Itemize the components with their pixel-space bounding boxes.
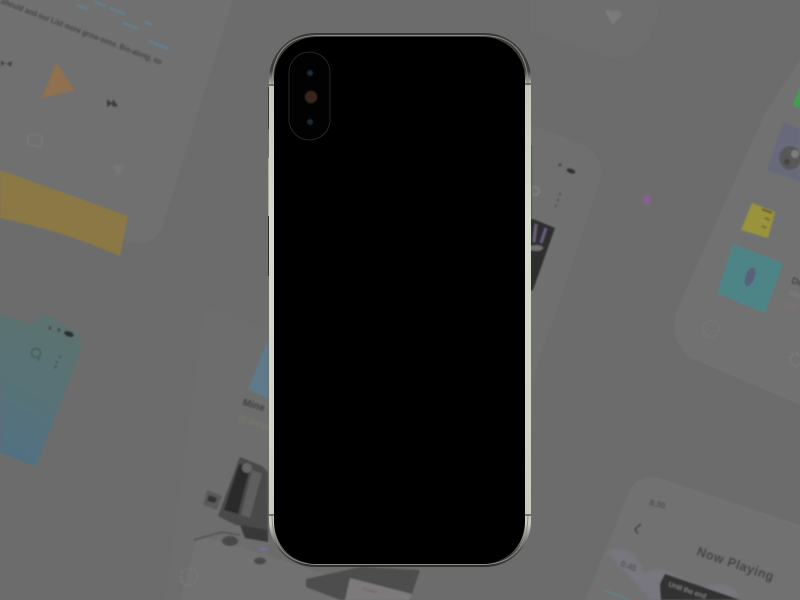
icon: library square xyxy=(27,134,43,147)
album cover: yellow xyxy=(741,203,775,238)
panel: dark cover screen behind phone xyxy=(528,124,602,386)
progress time: 0:45 xyxy=(619,559,638,574)
photo: turntable xyxy=(194,457,268,564)
icon: menu dots xyxy=(54,356,61,368)
icon: menu dots xyxy=(555,193,561,207)
panel: right album list screen xyxy=(674,60,800,405)
icon: orange play triangle xyxy=(42,63,75,98)
phone side buttons xyxy=(268,87,532,276)
camera lens: top xyxy=(307,70,313,76)
phone antenna bands xyxy=(269,84,531,515)
icon: back arrow xyxy=(635,524,641,534)
yellow waveform band xyxy=(0,170,128,256)
album cover: dark stripes xyxy=(528,217,555,292)
panel: album detail screen xyxy=(165,305,420,600)
green cover xyxy=(793,87,800,108)
album cover: teal xyxy=(717,244,783,313)
panel: now playing screen xyxy=(585,476,800,600)
icon: previous track xyxy=(1,60,12,67)
phone frame xyxy=(269,33,531,567)
progress bar xyxy=(604,590,630,600)
icon: status dots xyxy=(558,163,576,175)
album price: 3.99 xyxy=(782,301,798,312)
tooltip xyxy=(660,574,740,600)
phone back glass xyxy=(274,37,525,564)
album cover: portrait xyxy=(767,123,800,182)
icon: heart xyxy=(605,10,622,25)
photo: bottom cover: music xyxy=(362,586,378,596)
camera flash xyxy=(305,91,317,103)
panel: left teal phone screen xyxy=(0,314,82,465)
icon: status dots xyxy=(48,326,75,338)
album title: Mine xyxy=(241,397,267,415)
icon: next track xyxy=(107,99,118,107)
panel: top-centre screen xyxy=(530,0,666,58)
icon: settings xyxy=(790,354,800,366)
icon: library circle xyxy=(180,568,198,586)
camera lens: bottom xyxy=(307,119,313,125)
song count: 32 songs xyxy=(236,412,272,432)
camera module xyxy=(289,52,330,140)
waveform: lilac xyxy=(606,548,738,600)
icon: search xyxy=(531,187,539,195)
photo: bottom cover xyxy=(306,567,420,600)
status time: 8:30 xyxy=(649,498,667,511)
heading: now playing: Now Playing xyxy=(695,545,776,584)
accent dot xyxy=(643,196,651,204)
album cover: blue xyxy=(248,340,268,398)
panel: top-left playback screen xyxy=(0,0,236,256)
highlighted lyric words xyxy=(77,2,168,49)
phone frame highlight line xyxy=(272,36,528,564)
phone xyxy=(268,33,532,567)
icon: library circle xyxy=(703,321,719,337)
icon: heart xyxy=(112,164,125,175)
icon: search xyxy=(32,348,40,361)
